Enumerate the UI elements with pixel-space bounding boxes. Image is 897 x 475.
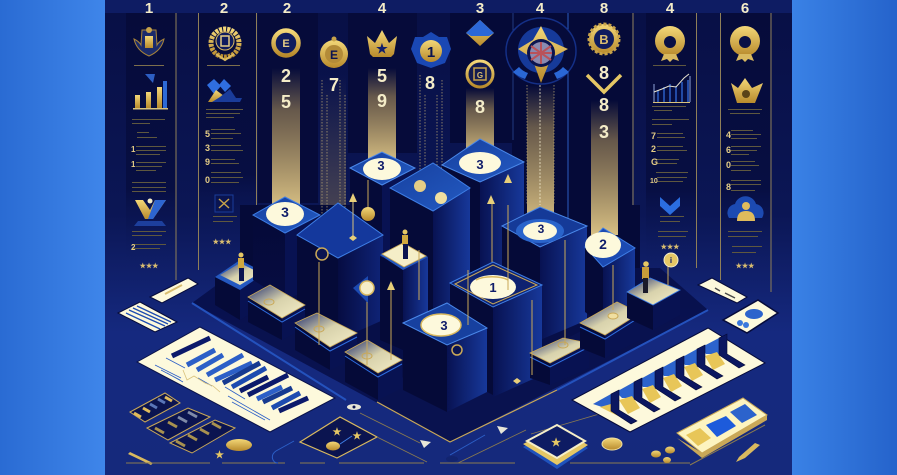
list numerals: 1 [131,160,136,169]
numbers on beams: 8 [599,95,609,115]
stacked square emblem: bottom center: ★ [551,437,561,449]
figure: person right [642,261,649,293]
column chart sheet: lower right [572,328,765,432]
text lines [728,109,762,253]
numbers on beams: 8 [425,73,435,93]
block: tall left number 3: 3 [281,204,289,220]
column header numbers [145,0,749,17]
card with stars: bottom center left: ★ [353,431,362,442]
connector lines and arrows [319,174,668,384]
column header numbers: 2 [283,0,291,17]
icon: blue chevron [660,197,680,215]
steps: right low [530,278,680,385]
icon: blue and gold check [134,198,166,226]
card: upper right [723,300,778,333]
icon: line chart [653,74,690,102]
icon: blue rosette number 1 [411,32,451,68]
column header numbers: 4 [666,0,675,17]
arrow markers [349,174,521,384]
list numerals [205,129,210,185]
icon: sunburst badge: B [599,32,609,47]
block: right number 2: 2 [599,236,607,252]
column 8 content [650,26,690,251]
block: right number 2 [585,228,635,328]
icon: blue and gold diamonds [207,79,242,102]
list numerals: 2 [651,144,656,154]
list numerals: 3 [205,143,210,153]
icon: small cross emblem [215,195,233,212]
list numerals: 7 [651,131,656,141]
list numerals: 0 [726,160,731,170]
pencil and gold token: bottom left [128,439,252,465]
column header numbers: 8 [600,0,608,17]
label strip: upper left [150,278,198,303]
list numerals: 1 [131,145,136,154]
column header numbers: 6 [741,0,749,17]
small document: lower left [118,302,177,332]
block: tallest number 3: 3 [476,157,484,172]
icon: laurel crest [134,27,164,56]
icon: gold laurel seal [211,29,239,60]
gold coins: bottom [602,438,760,463]
coin markers on columns: i [670,256,672,265]
pencil and gold token: bottom left: ★ [215,450,224,461]
block: tall number 3 behind [350,152,415,265]
numbers on beams: 5 [281,92,291,112]
dark backdrop behind blocks [240,205,640,400]
icon: E coin [274,30,298,56]
column 1 content [131,27,168,270]
icon: gold ribbon rosette [730,26,760,62]
numbers on beams: 8 [475,97,485,117]
block: center number 1 [450,262,542,397]
icon: blue gold diamond [466,20,494,46]
icon: crown with star: ★ [376,41,388,56]
coin markers [414,180,447,204]
list numerals [650,131,658,185]
column 9 content [726,26,764,270]
chart sheet: lower left [137,327,335,432]
block: tallest number 3 [442,139,524,320]
list numerals: 0 [205,175,210,185]
stars: ★★★ [140,262,159,270]
column 2 content [205,29,243,246]
floor plane [192,268,708,442]
column header numbers: 4 [378,0,387,17]
center column icons and numbers [274,18,621,142]
icon: person in blue cloud [727,196,764,221]
text lines and zigzag [155,358,270,420]
block: tall left number 3 [253,197,320,300]
figure: person left [238,252,244,281]
card with stars: bottom center left: ★ [333,427,342,438]
steps: left low [248,285,402,400]
block: tall number 3 behind: 3 [377,158,385,173]
figure: person middle [402,230,408,259]
tablet: bottom right [677,398,767,465]
small marker icons [347,404,508,462]
numbers on beams: 3 [599,122,609,142]
icon: gold chevron [587,75,621,92]
list numerals: 8 [726,182,731,192]
icon: E laurel medal [320,36,348,68]
numbers on beams: 9 [377,91,387,111]
block: front number 3: 3 [440,318,448,333]
block: large right number 3 [502,207,587,340]
icon: sunburst badge [589,24,619,54]
bars [172,338,308,411]
light beams [272,13,618,235]
numbers on beams: 8 [599,63,609,83]
icon: gold ribbon rosette [655,26,685,62]
block: blue top with coins [390,163,470,325]
mini gold lists: lower left [130,393,235,453]
dark L blocks [611,334,745,424]
icon: gold seal [467,61,493,87]
connector lines: bottom [126,404,690,463]
column header numbers: 3 [476,0,484,17]
card with stars: bottom center left [300,417,377,458]
block: center number 1: 1 [489,280,497,295]
text lines [132,119,166,249]
block: large right number 3: 3 [538,222,545,236]
block: far left with figure [215,260,265,320]
numbers on beams: 2 [281,66,291,86]
caption lines [207,65,240,66]
caption lines [134,65,164,66]
stars: ★★★ [661,243,680,251]
list numerals: 2 [131,243,136,252]
icon: E laurel medal: E [330,48,338,62]
column header numbers: 1 [145,0,153,17]
numbers on beams: 7 [329,75,339,95]
icon: blue rosette number 1: 1 [427,44,435,61]
column panels and dividers [126,13,771,292]
icon: bar chart [133,74,168,110]
stars: ★★★ [213,238,232,246]
block: wide left [297,203,383,340]
list numerals [726,130,731,192]
stars: ★★★ [736,262,755,270]
strip label: upper right [698,278,747,303]
column header numbers: 2 [220,0,228,17]
text lines [206,109,243,222]
list numerals: 6 [726,145,731,155]
list bars [134,397,221,446]
column header numbers: 4 [536,0,545,17]
text lines [652,65,689,237]
list numerals: 4 [726,130,731,140]
icon: star emblem with flag [506,18,576,84]
block: mid with figure [380,243,428,350]
blue and yellow wedges [593,338,725,416]
icon: crown with star [367,30,397,57]
list numerals: 10 [650,178,658,185]
list numerals: 5 [205,129,210,139]
isometric podium blocks [215,139,680,412]
numbers on beams [281,63,609,142]
block: front number 3 [403,303,487,412]
list numerals: 9 [205,157,210,167]
numbers on beams: 5 [377,66,387,86]
list numerals: G [651,157,658,167]
stacked square emblem: bottom center [523,425,588,469]
coin markers on columns [316,207,678,355]
icon: crown [731,78,763,103]
icon: E coin: E [282,38,290,50]
list numerals [131,145,136,252]
icon: gold seal: G [477,71,483,80]
